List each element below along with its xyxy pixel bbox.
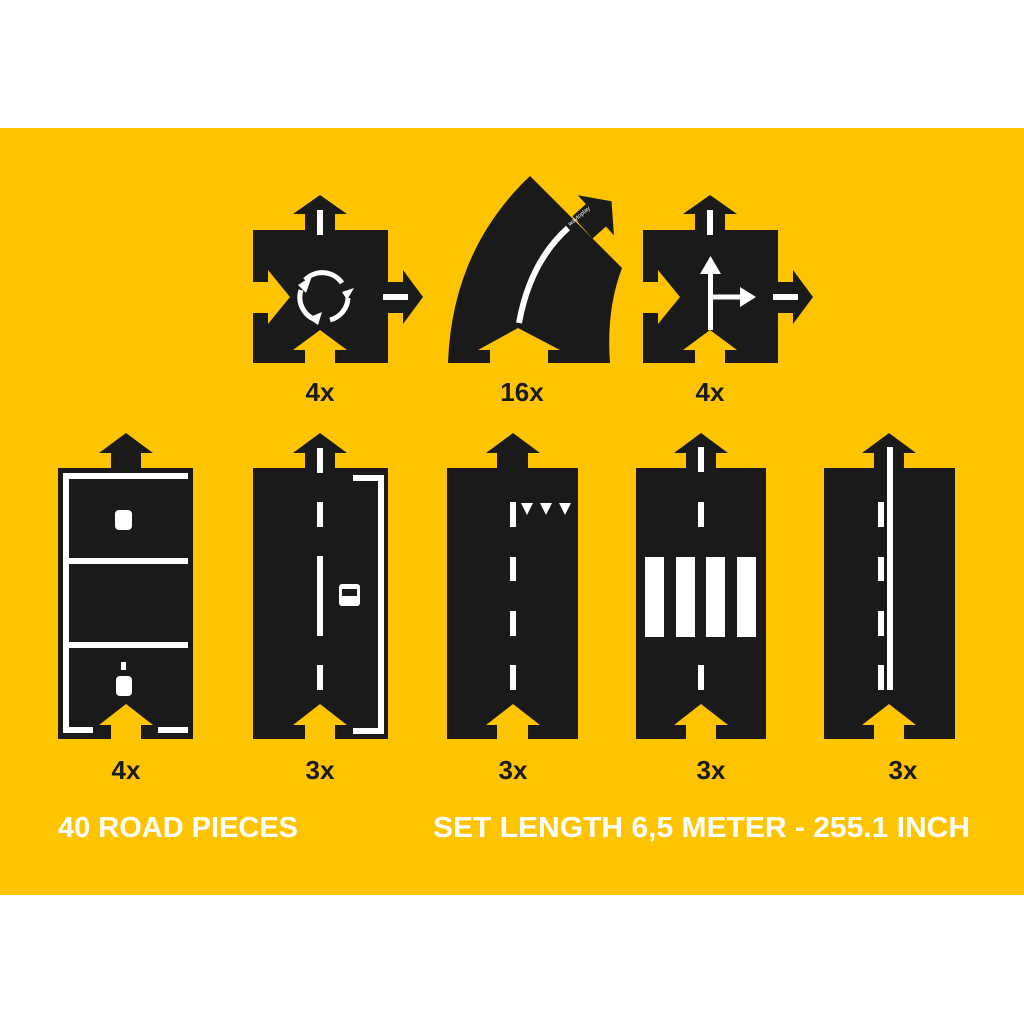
icon: car [115, 510, 132, 530]
icon: bus [339, 584, 360, 606]
piece: roundabout [253, 195, 423, 363]
panel: yellow background band [0, 128, 1024, 895]
counts bottom [112, 755, 918, 785]
caption: total pieces: 40 ROAD PIECES [58, 812, 298, 844]
caption: set length: SET LENGTH 6,5 METER - 255.1 INCH [433, 812, 970, 844]
counts top: 16x [500, 377, 544, 407]
icon: junction arrows [700, 256, 756, 330]
counts bottom: 4x [112, 755, 141, 785]
piece: yield road [447, 433, 578, 739]
piece: crosswalk [636, 433, 766, 739]
counts bottom: 3x [697, 755, 726, 785]
piece: solid line road [824, 433, 955, 739]
piece: curve: waytoplay [567, 206, 592, 228]
piece: T-junction [643, 195, 813, 363]
piece: curve [448, 176, 630, 363]
piece: parking [58, 433, 193, 739]
counts bottom: 3x [499, 755, 528, 785]
piece: bus road [253, 433, 388, 739]
icon: electric car [116, 676, 132, 696]
counts top: 4x [306, 377, 335, 407]
counts bottom: 3x [889, 755, 918, 785]
counts top [306, 377, 725, 407]
icon: roundabout arrows [300, 273, 348, 320]
counts top: 4x [696, 377, 725, 407]
counts bottom: 3x [306, 755, 335, 785]
